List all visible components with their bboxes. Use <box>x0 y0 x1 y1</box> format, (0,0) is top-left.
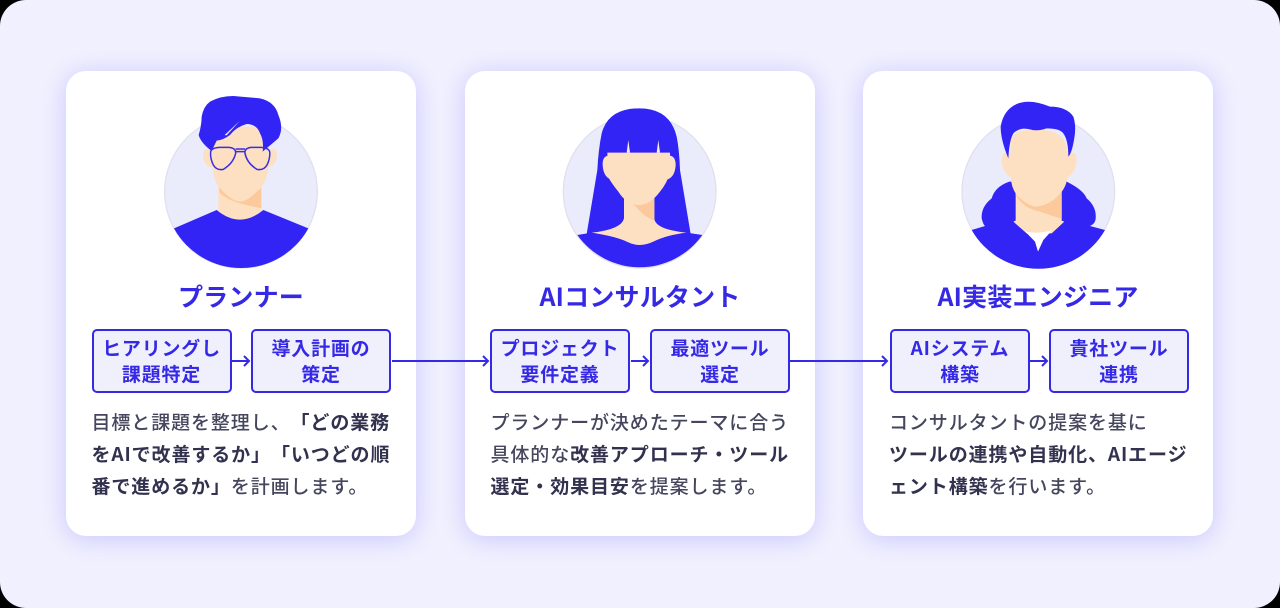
text: planner description: 目標と課題を整理し、「どの業務 <box>92 408 390 435</box>
icon: planner avatar <box>164 96 318 268</box>
text: planner description <box>92 408 390 499</box>
step box: tool integration: 連携 <box>1099 360 1139 386</box>
text: planner description: をAIで改善するか」「いつどの順 <box>92 440 390 467</box>
step box: project requirements <box>490 329 630 392</box>
text: engineer description: ェント構築を行います。 <box>889 472 1106 499</box>
step box: tool integration: 貴社ツール <box>1069 334 1168 360</box>
text: consultant description <box>490 408 789 499</box>
panel: AI engineer <box>863 71 1213 536</box>
step box: AI system build: 構築 <box>940 360 980 386</box>
text: engineer description <box>889 408 1187 499</box>
panel: planner <box>66 71 416 536</box>
heading: AI consultant: AIコンサルタント <box>539 278 741 314</box>
step box: project requirements: プロジェクト <box>501 334 619 360</box>
text: planner description: 番で進めるか」を計画します。 <box>92 472 368 499</box>
step box: hearing <box>92 329 232 392</box>
text: engineer description: ツールの連携や自動化、AIエージ <box>889 440 1187 467</box>
step box: plan <box>251 329 391 392</box>
step box: hearing: ヒアリングし <box>102 334 221 360</box>
text: consultant description: 具体的な改善アプローチ・ツール <box>490 440 789 467</box>
step box: tool selection: 最適ツール <box>670 334 770 360</box>
text: engineer description: コンサルタントの提案を基に <box>889 408 1148 435</box>
panel: AI consultant <box>465 71 815 536</box>
icon: engineer avatar <box>961 102 1116 269</box>
text: consultant description: 選定・効果目安を提案します。 <box>490 472 767 499</box>
step box: hearing: 課題特定 <box>122 360 201 386</box>
step box: tool selection <box>650 329 790 392</box>
step box: plan: 導入計画の <box>271 334 370 360</box>
step box: plan: 策定 <box>301 360 341 386</box>
step box: tool selection: 選定 <box>700 360 740 386</box>
heading: AI engineer: AI実装エンジニア <box>937 278 1139 314</box>
step box: tool integration <box>1049 329 1189 392</box>
step box: project requirements: 要件定義 <box>520 360 600 386</box>
step box: AI system build: AIシステム <box>911 334 1009 360</box>
icon: consultant avatar <box>562 108 717 268</box>
text: consultant description: プランナーが決めたテーマに合う <box>490 408 789 435</box>
heading: planner: プランナー <box>178 278 304 314</box>
step box: AI system build <box>890 329 1030 392</box>
